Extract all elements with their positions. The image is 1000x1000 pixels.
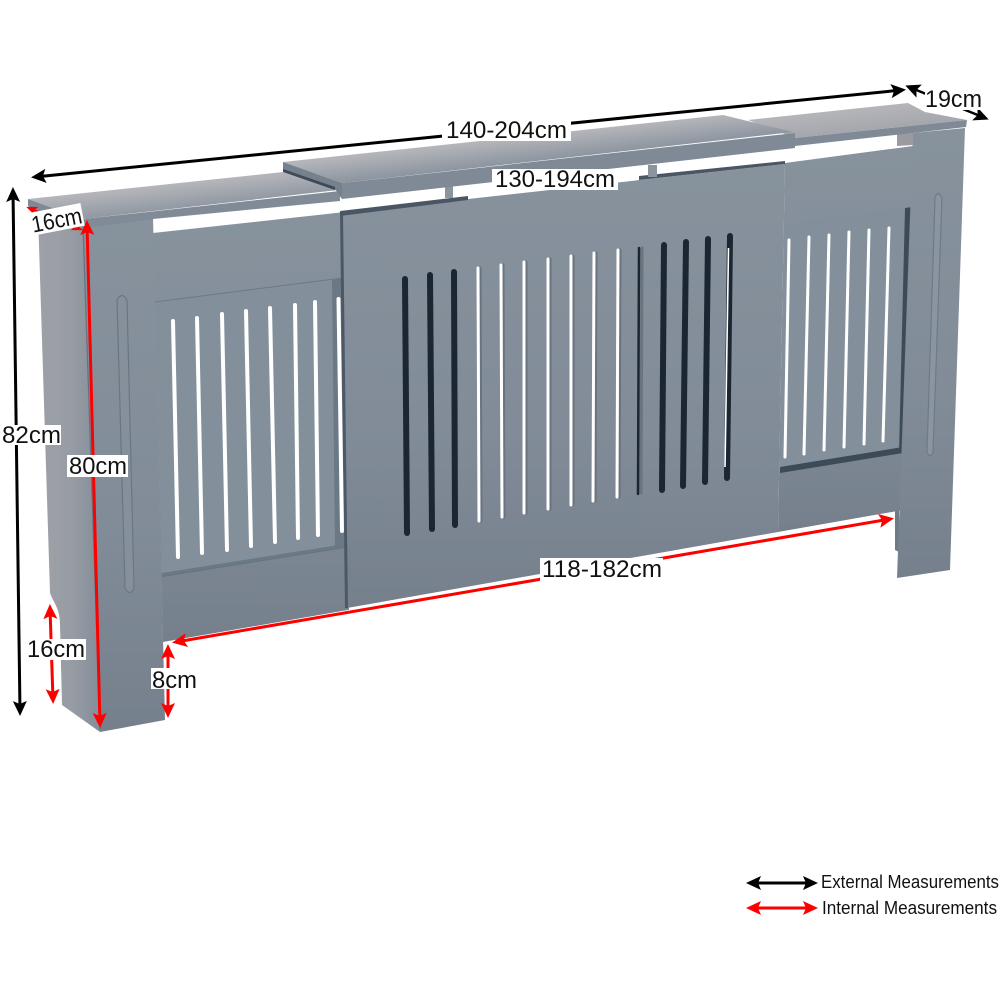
legend: external arrow [750,882,814,884]
front edge left [83,191,340,228]
middle top board [283,115,795,199]
right top board [748,103,967,146]
rail right [639,161,785,180]
label: 80cm: 80cm [69,453,127,480]
label: 16cm rotated: 16cm [29,202,84,238]
depth arrow: 19cm [909,87,985,118]
centre slats grey inner [480,248,642,521]
legend: internal arrow [750,906,814,910]
label: 118-182cm: 118-182cm [542,556,662,583]
rear support right [897,133,913,146]
right recessed panel [780,207,909,472]
top surface middle [283,115,793,183]
right post [897,128,965,578]
left slats [173,299,342,557]
bracket left [445,186,453,198]
centre slats dark [405,236,730,533]
slat highlight [725,248,728,467]
rail left [340,196,468,216]
left side panel [38,214,100,732]
width arrow: 140-204cm [35,90,902,177]
left recessed panel [155,278,347,576]
left post edge [83,226,100,730]
left post groove [117,296,134,592]
left frame [153,212,349,642]
front edge middle [342,133,795,199]
radiator cover product illustration [28,103,967,732]
bracket right [648,165,657,177]
internal width halo [170,518,893,644]
label: 16cm leg: 16cm [27,636,85,663]
leg depth arrow: 16cm [50,608,53,700]
side shadow [283,169,335,190]
left recess shadows [162,278,347,577]
left post [83,217,165,732]
centre slats white [478,250,618,521]
right slats [785,228,889,457]
right post groove [927,194,942,456]
internal height arrow: 80cm [87,224,100,724]
front edge right [795,120,967,146]
right frame [778,146,913,532]
label: 19cm: 19cm [925,86,982,113]
height arrow: 82cm [13,191,20,712]
leg height arrow: 8cm [166,648,170,714]
slat with dark edge [638,248,639,494]
back right leg [895,505,899,552]
label: 130-194cm: 130-194cm [495,166,615,193]
label: 8cm: 8cm [152,667,197,694]
right recess shadows [780,207,912,473]
top surface left [28,172,338,219]
internal depth arrow: 16cm top [29,208,80,229]
top surface right [748,103,967,138]
legend [750,872,999,918]
label: 82cm: 82cm [2,422,61,449]
left end edge [28,199,83,228]
centre panel edge [340,213,348,608]
left top board [28,172,340,228]
left recess top line [155,278,342,302]
label: 140-204cm: 140-204cm [446,117,567,144]
internal width arrow: 118-182cm [176,519,890,642]
side edge middle [283,162,342,199]
centre sliding panel [341,164,785,608]
